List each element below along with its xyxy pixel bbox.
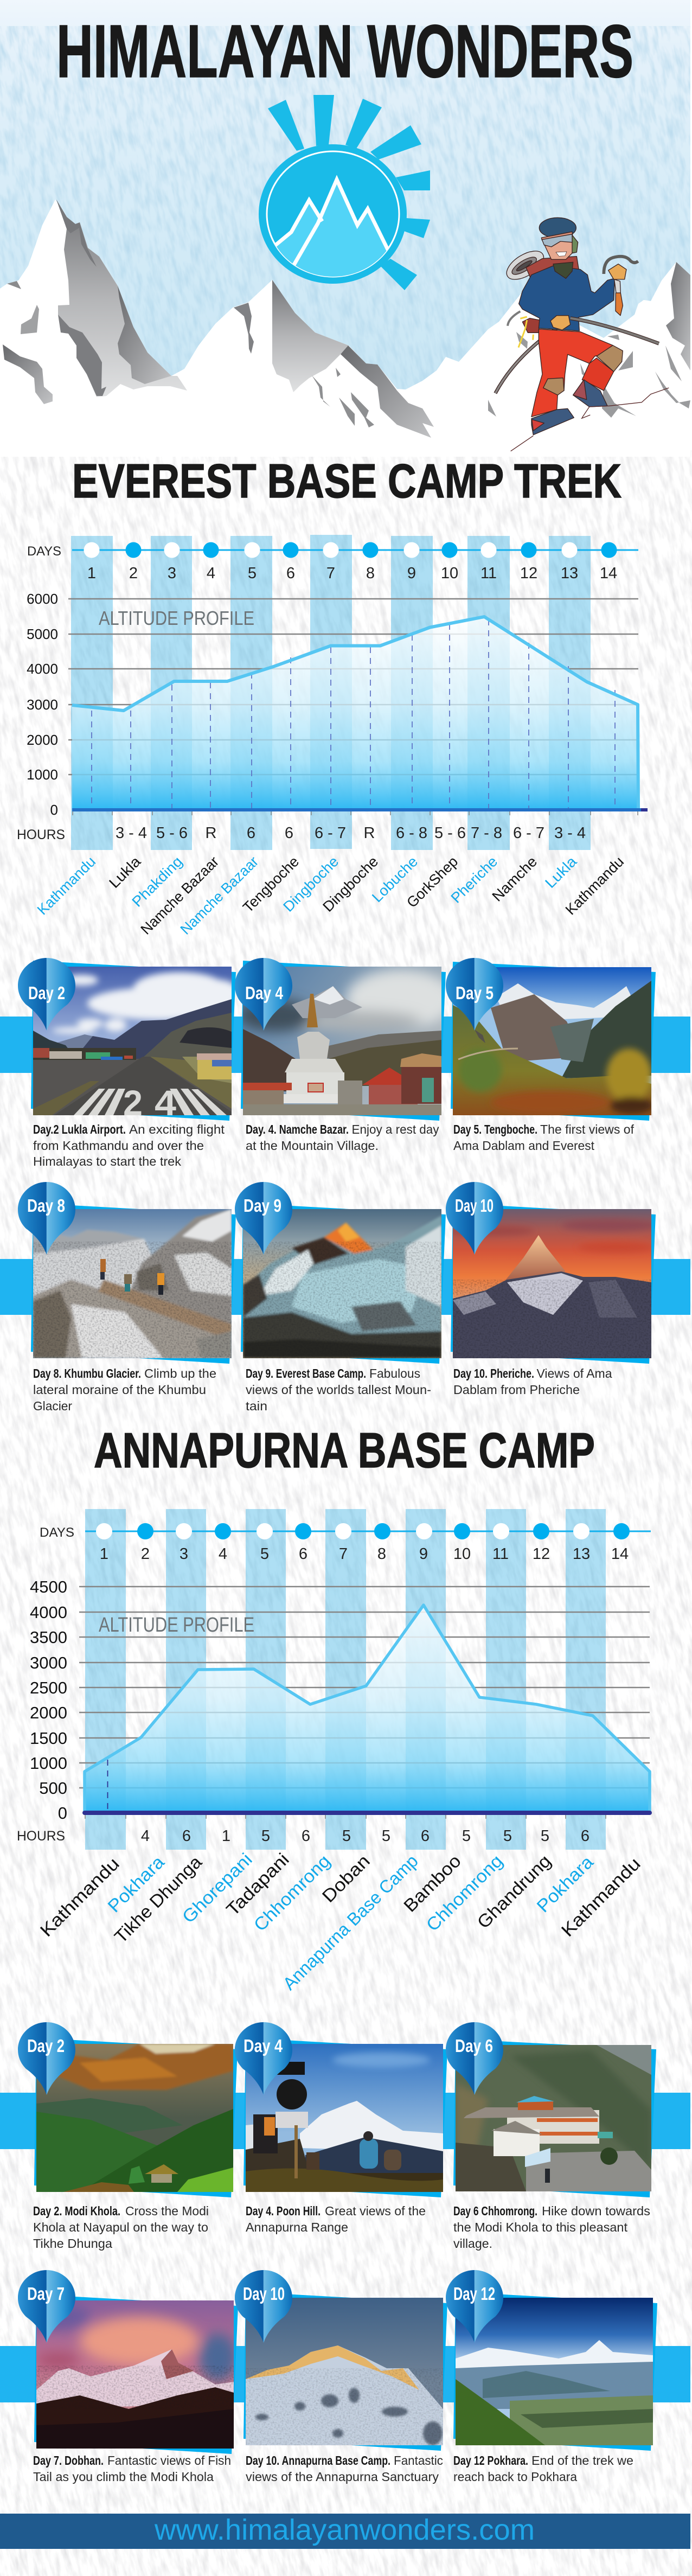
hours row: 6 — [182, 1827, 191, 1845]
photo: Fish Tail at dusk — [36, 2300, 234, 2449]
days timeline: 2 — [129, 565, 138, 582]
hours row: 5 — [382, 1827, 390, 1845]
hours row: HOURS — [17, 1829, 65, 1844]
hours row: 5 — [462, 1827, 471, 1845]
photo: Lukla airport: 4 — [155, 1083, 176, 1123]
hours row: 5 — [503, 1827, 512, 1845]
caption: day 2 Lukla: An exciting flight — [129, 1122, 225, 1136]
caption: day 8 Khumbu: Day 8. Khumbu Glacier. — [33, 1366, 141, 1380]
altitude axis labels — [30, 1577, 67, 1823]
hours row: 6 — [581, 1827, 590, 1845]
stop names — [34, 853, 627, 938]
days timeline: 3 — [168, 565, 176, 582]
altitude area — [85, 1605, 650, 1813]
stop names — [36, 1849, 644, 1994]
caption: day 10 Pheriche: Views of Ama — [537, 1366, 612, 1380]
days timeline: 14 — [600, 565, 617, 582]
days timeline — [85, 1523, 651, 1563]
days timeline: 1 — [100, 1545, 108, 1563]
caption: day 10 Pheriche: Dablam from Pheriche — [453, 1383, 580, 1397]
map pins: Everest photos: Day 5 — [456, 983, 494, 1003]
caption: day 2 Lukla — [33, 1122, 225, 1168]
caption: day 8 Khumbu: Glacier — [33, 1399, 72, 1413]
days timeline: 13 — [573, 1545, 590, 1563]
map pins: Annapurna photos: Day 4 — [244, 2036, 283, 2056]
caption: day 7 Dobhan: Day 7. Dobhan. — [33, 2453, 104, 2468]
caption: day 12 Pokhara — [453, 2453, 633, 2484]
days timeline: 4 — [219, 1545, 227, 1563]
photo: Khumbu glacier — [33, 1209, 232, 1358]
altitude axis labels: 0 — [58, 1804, 67, 1823]
stop names: Lukla — [106, 853, 144, 891]
logo: sun and mountain — [259, 95, 430, 290]
days timeline: 14 — [611, 1545, 629, 1563]
chart title: ALTITUDE PROFILE — [99, 607, 254, 629]
hours row: 6 — [421, 1827, 430, 1845]
caption: day 5 Tengboche — [453, 1122, 635, 1153]
stop names: Chhomrong — [422, 1851, 507, 1935]
caption: day 6 Chhomrong: the Modi Khola to this pleasant — [453, 2220, 628, 2234]
days timeline: 4 — [207, 565, 215, 582]
caption: day 7 Dobhan: Fantastic views of Fish — [107, 2453, 231, 2468]
map pins: Annapurna photos: Day 12 — [453, 2284, 495, 2304]
map pins: Annapurna photos — [18, 2022, 503, 2343]
map pins: Annapurna photos: Day 7 — [27, 2284, 65, 2304]
stop names: Annapurna Base Camp — [279, 1851, 422, 1994]
caption: day 9 Everest Base Camp: views of the worlds tallest Moun- — [246, 1383, 431, 1397]
caption: day 10 Pheriche — [453, 1366, 612, 1397]
stop names: Phakding — [129, 853, 185, 910]
footer bar: www.himalayanwonders.com — [154, 2514, 535, 2546]
days timeline: 7 — [326, 565, 335, 582]
caption: day 6 Chhomrong: Day 6 Chhomrong. — [453, 2204, 537, 2218]
photo: Ama Dablam — [453, 1209, 651, 1358]
caption: day 12 Pokhara: Day 12 Pokhara. — [453, 2453, 528, 2468]
days timeline: 8 — [377, 1545, 386, 1563]
altitude axis labels: 1000 — [30, 1754, 67, 1773]
caption: day 2 Modi Khola — [33, 2204, 209, 2251]
days timeline: 1 — [87, 565, 96, 582]
caption: day 10 Annapurna Base Camp: Fantastic — [394, 2453, 443, 2468]
days timeline: 13 — [561, 565, 578, 582]
hours row: 6 - 8 — [396, 824, 427, 842]
stop names: Pokhara — [533, 1851, 597, 1916]
photo: Modi Khola — [36, 2044, 233, 2192]
altitude axis labels: 4000 — [30, 1603, 67, 1622]
hours row: R — [206, 824, 216, 842]
days timeline: 11 — [480, 565, 497, 582]
stop names: Pokhara — [104, 1851, 168, 1916]
chart: Annapurna altitude profile — [17, 1509, 651, 1994]
caption: day 10 Annapurna Base Camp: views of the Annapurna Sanctuary — [246, 2470, 439, 2484]
altitude line — [72, 617, 638, 810]
days timeline: 10 — [441, 565, 458, 582]
days timeline: 7 — [339, 1545, 348, 1563]
days timeline: 6 — [299, 1545, 307, 1563]
days timeline: 12 — [533, 1545, 550, 1563]
caption: day 9 Everest Base Camp: tain — [246, 1399, 267, 1413]
stop names: Kathmandu — [34, 853, 99, 918]
hours row: 6 - 7 — [513, 824, 544, 842]
altitude axis labels: 5000 — [27, 626, 58, 642]
altitude axis labels — [27, 591, 58, 818]
stop names: Namche — [489, 853, 540, 905]
caption: day 4 Namche: at the Mountain Village. — [246, 1139, 379, 1153]
stop names: Bamboo — [400, 1851, 465, 1916]
photo: Pokhara valley — [456, 2298, 653, 2445]
caption: day 5 Tengboche: Day 5. Tengboche. — [453, 1122, 537, 1136]
caption: day 4 Poon Hill: Annapurna Range — [246, 2220, 348, 2234]
caption: day 8 Khumbu — [33, 1366, 216, 1413]
caption: day 9 Everest Base Camp: Fabulous — [369, 1366, 420, 1380]
altitude area — [72, 617, 640, 810]
stop names: Ghandrung — [473, 1851, 555, 1932]
stop names: Dingboche — [280, 853, 342, 915]
hours row: 5 — [342, 1827, 351, 1845]
caption: day 6 Chhomrong — [453, 2204, 650, 2251]
altitude axis labels: 6000 — [27, 591, 58, 607]
stop names: GorkShep — [403, 853, 461, 911]
hours row: 7 - 8 — [471, 824, 502, 842]
altitude axis labels: 2500 — [30, 1678, 67, 1697]
hours row: R — [364, 824, 375, 842]
caption: day 7 Dobhan: Tail as you climb the Modi Khola — [33, 2470, 214, 2484]
footer bar — [0, 2514, 690, 2549]
hours row: 5 - 6 — [434, 824, 466, 842]
altitude line — [85, 1605, 650, 1813]
caption: day 2 Lukla: Day.2 Lukla Airport. — [33, 1122, 126, 1136]
caption: day 2 Modi Khola: Tikhe Dhunga — [33, 2236, 112, 2251]
map pins: Annapurna photos: Day 10 — [243, 2284, 285, 2304]
caption: day 8 Khumbu: Climb up the — [144, 1366, 216, 1380]
altitude axis labels: 0 — [50, 802, 58, 818]
caption: day 4 Namche: Day. 4. Namche Bazar. — [246, 1122, 349, 1136]
snow mountains — [0, 200, 690, 457]
stop names: Chhomrong — [249, 1851, 334, 1935]
hours row: 5 — [261, 1827, 270, 1845]
caption: day 12 Pokhara: reach back to Pokhara — [453, 2470, 577, 2484]
days timeline — [72, 542, 638, 582]
days label: DAYS — [40, 1525, 74, 1540]
days timeline: 9 — [407, 565, 416, 582]
caption: day 9 Everest Base Camp — [246, 1366, 431, 1413]
stop names: Kathmandu — [562, 853, 627, 918]
caption: day 2 Modi Khola: Cross the Modi — [125, 2204, 209, 2218]
map pins: Everest photos: Day 8 — [27, 1196, 65, 1216]
map pins: Everest photos: Day 2 — [28, 983, 65, 1003]
caption: day 2 Lukla: Himalayas to start the trek — [33, 1154, 182, 1168]
hours row: 6 - 7 — [315, 824, 346, 842]
caption: day 9 Everest Base Camp: Day 9. Everest Base Camp. — [246, 1366, 366, 1380]
caption: day 4 Namche — [246, 1122, 439, 1153]
caption: day 8 Khumbu: lateral moraine of the Khumbu — [33, 1383, 206, 1397]
map pins: Everest photos: Day 9 — [244, 1196, 281, 1216]
map pins: Everest photos: Day 4 — [245, 983, 284, 1003]
hours row: 6 — [285, 824, 293, 842]
caption: day 10 Annapurna Base Camp: Day 10. Annapurna Base Camp. — [246, 2453, 390, 2468]
caption: day 4 Namche: Enjoy a rest day — [351, 1122, 439, 1136]
hours row — [17, 1827, 590, 1845]
photo: Lukla airport — [33, 967, 232, 1123]
hours row: 6 — [302, 1827, 310, 1845]
map pins: Annapurna photos: Day 6 — [455, 2036, 493, 2056]
hours row: 5 - 6 — [156, 824, 188, 842]
days timeline: 2 — [141, 1545, 150, 1563]
blue strips: Everest photos — [0, 1017, 690, 1315]
blue strips: Annapurna photos — [0, 2093, 690, 2402]
stop names: Lukla — [542, 853, 580, 891]
stop names: Pheriche — [448, 853, 501, 906]
caption: day 4 Poon Hill — [246, 2204, 426, 2234]
altitude axis labels: 3000 — [30, 1653, 67, 1672]
caption: day 6 Chhomrong: Hike down towards — [542, 2204, 650, 2218]
caption: day 4 Poon Hill: Great views of the — [325, 2204, 426, 2218]
caption: day 5 Tengboche: The first views of — [540, 1122, 635, 1136]
days timeline: 6 — [286, 565, 295, 582]
hours row: 5 — [541, 1827, 549, 1845]
stop names: Tikhe Dhunga — [111, 1851, 206, 1947]
climber illustration — [495, 218, 669, 451]
hours row — [17, 824, 586, 842]
stop names: Dingboche — [319, 853, 381, 915]
altitude axis labels: 1000 — [27, 766, 58, 783]
days timeline: 10 — [453, 1545, 471, 1563]
photo: Poon Hill — [246, 2044, 443, 2192]
days timeline: 12 — [520, 565, 537, 582]
altitude axis labels: 1500 — [30, 1729, 67, 1748]
caption: day 12 Pokhara: End of the trek we — [531, 2453, 633, 2468]
altitude axis labels: 2000 — [27, 732, 58, 748]
stop names: Doban — [318, 1851, 374, 1906]
altitude axis labels: 4000 — [27, 661, 58, 677]
days timeline: 9 — [419, 1545, 428, 1563]
altitude axis labels: 3500 — [30, 1628, 67, 1647]
stop names: Tadapani — [222, 1849, 293, 1920]
days label: DAYS — [27, 544, 61, 559]
map pins: Annapurna photos: Day 2 — [27, 2036, 65, 2056]
photo frames: Everest — [31, 961, 656, 1364]
stop names: Tengboche — [240, 853, 302, 916]
header sky — [0, 0, 690, 456]
days timeline: 11 — [492, 1545, 509, 1563]
photo: Namche stupa — [243, 967, 441, 1115]
caption: day 10 Annapurna Base Camp — [246, 2453, 443, 2484]
altitude axis labels: 3000 — [27, 696, 58, 713]
chart title: ALTITUDE PROFILE — [99, 1614, 254, 1637]
altitude axis labels: 500 — [39, 1779, 67, 1798]
photo: Lukla airport: 2 — [123, 1083, 143, 1123]
caption: day 7 Dobhan — [33, 2453, 231, 2484]
stop names: Kathmandu — [36, 1853, 123, 1940]
days timeline: 8 — [366, 565, 375, 582]
hours row: 6 — [247, 824, 255, 842]
hours row: 3 - 4 — [116, 824, 147, 842]
photo: Everest sunset — [243, 1209, 441, 1358]
hours row: HOURS — [17, 827, 65, 842]
chart: Everest altitude profile — [17, 535, 648, 938]
hours row: 4 — [141, 1827, 150, 1845]
stop names: Kathmandu — [557, 1853, 644, 1940]
altitude axis labels: 2000 — [30, 1703, 67, 1722]
caption: day 6 Chhomrong: village. — [453, 2236, 492, 2251]
caption: day 10 Pheriche: Day 10. Pheriche. — [453, 1366, 534, 1380]
caption: day 2 Modi Khola: Day 2. Modi Khola. — [33, 2204, 120, 2218]
days timeline: 5 — [248, 565, 257, 582]
hours row: 1 — [222, 1827, 230, 1845]
stop names: Lobuche — [369, 853, 421, 905]
photo frames: Annapurna — [34, 2038, 657, 2454]
caption: day 2 Modi Khola: Khola at Nayapul on the way to — [33, 2220, 208, 2234]
stop names: Namche Bazaar — [138, 853, 222, 938]
hours row: 3 - 4 — [554, 824, 586, 842]
altitude axis labels: 4500 — [30, 1577, 67, 1596]
caption: day 4 Poon Hill: Day 4. Poon Hill. — [246, 2204, 321, 2218]
days timeline: 5 — [260, 1545, 269, 1563]
photo: Tengboche valley — [453, 967, 651, 1115]
stop names: Ghorepani — [178, 1849, 256, 1927]
days timeline: 3 — [180, 1545, 188, 1563]
map pins: Everest photos — [18, 958, 503, 1255]
caption: day 2 Lukla: from Kathmandu and over the — [33, 1139, 204, 1153]
caption: day 5 Tengboche: Ama Dablam and Everest — [453, 1139, 595, 1153]
map pins: Everest photos: Day 10 — [455, 1196, 494, 1216]
photo: Chhomrong village — [456, 2045, 651, 2191]
stop names: Namche Bazaar — [177, 853, 261, 938]
photo: Annapurna Base Camp — [246, 2298, 443, 2445]
